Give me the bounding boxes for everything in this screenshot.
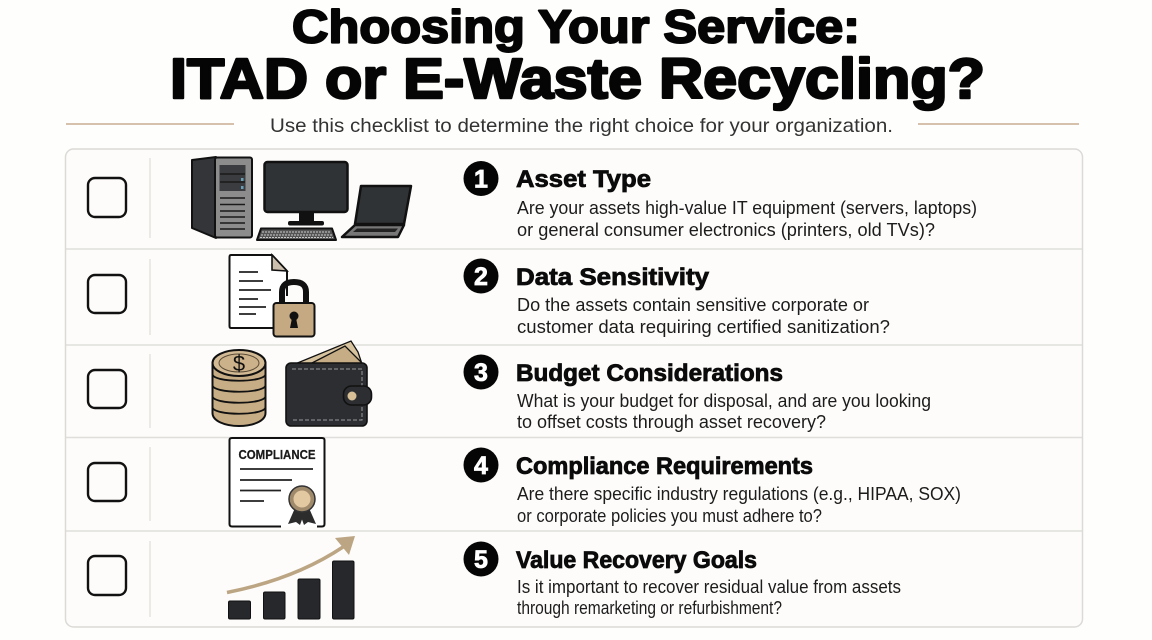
number badge 4: 4 (474, 452, 488, 480)
description 2 (517, 295, 890, 337)
description 3 (517, 391, 931, 432)
checkbox 5 (88, 556, 126, 595)
heading: data sensitivity: Data Sensitivity (516, 264, 710, 291)
number badge 5 (464, 542, 498, 576)
checkbox 1 (88, 178, 126, 217)
title (170, 0, 985, 111)
number badge 3: 3 (474, 359, 488, 387)
description 1: or general consumer electronics (printers, old TVs)? (517, 220, 935, 240)
description 5: Is it important to recover residual value from assets (517, 577, 901, 597)
checkbox 2 (88, 275, 126, 313)
description 4: Are there specific industry regulations (e.g., HIPAA, SOX) (517, 484, 961, 504)
description 2: customer data requiring certified sanitization? (517, 317, 890, 337)
icon: coins and wallet (212, 341, 372, 426)
description 5 (517, 577, 901, 618)
description 5: through remarketing or refurbishment? (517, 598, 782, 618)
title: ITAD or E-Waste Recycling? (170, 47, 985, 111)
description 1 (517, 198, 977, 240)
description 4: or corporate policies you must adhere to? (517, 506, 822, 526)
checkbox 3 (88, 370, 126, 408)
description 3: to offset costs through asset recovery? (517, 412, 826, 432)
checkbox 4 (88, 463, 126, 501)
icon: coins and wallet: $ (233, 351, 245, 376)
number badge 2: 2 (474, 263, 488, 291)
icon: growth bar chart (227, 536, 355, 619)
row 3: budget considerations (88, 341, 931, 432)
description 1: Are your assets high-value IT equipment (servers, laptops) (517, 198, 977, 218)
description 4 (517, 484, 961, 526)
row 2: data sensitivity (88, 255, 890, 337)
title: Choosing Your Service: (292, 0, 860, 52)
heading: value recovery goals: Value Recovery Goals (516, 547, 757, 574)
number badge 5: 5 (474, 546, 488, 574)
number badge 1 (464, 161, 498, 196)
number badge 1: 1 (474, 166, 488, 194)
row 1: asset type (88, 157, 977, 240)
icon: document and padlock (230, 255, 314, 336)
row 4: compliance requirements (88, 438, 961, 526)
icon: compliance certificate (230, 438, 324, 526)
number badge 4 (464, 448, 498, 482)
subtitle: Use this checklist to determine the right choice for your organization. (270, 115, 893, 137)
panel: checklist (66, 149, 1082, 627)
row 5: value recovery goals (88, 536, 901, 619)
number badge 2 (464, 258, 498, 294)
icon: compliance certificate: COMPLIANCE (238, 448, 316, 462)
heading: budget considerations: Budget Considerations (516, 360, 783, 387)
number badge 3 (464, 354, 498, 390)
icon: computers (192, 157, 411, 240)
description 2: Do the assets contain sensitive corporate or (517, 295, 869, 315)
description 3: What is your budget for disposal, and are you looking (517, 391, 931, 411)
heading: asset type: Asset Type (516, 166, 651, 193)
heading: compliance requirements: Compliance Requirements (516, 453, 813, 480)
